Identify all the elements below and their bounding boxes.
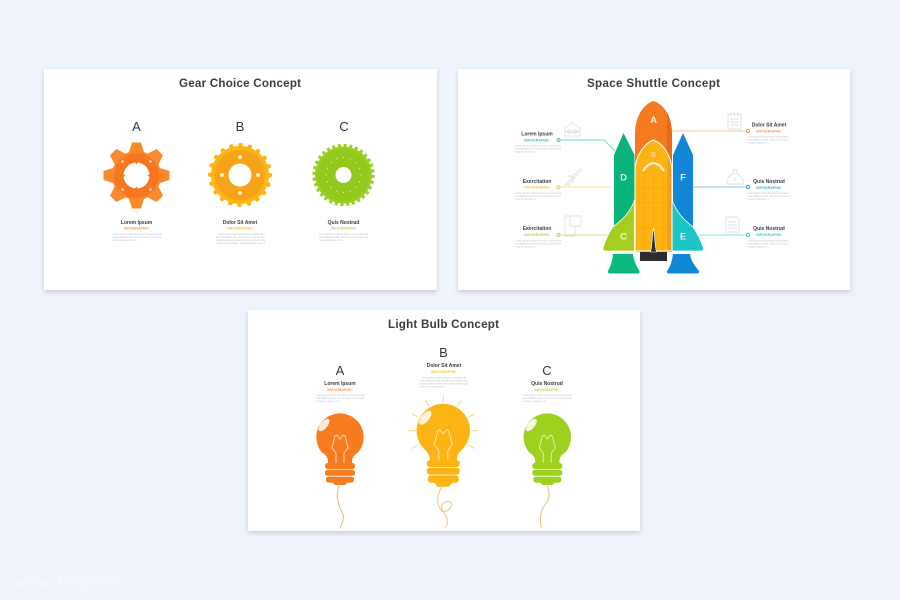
icon: building xyxy=(565,121,580,136)
black engine bar xyxy=(640,252,667,261)
text block: gear B: sed adipiscing elit, sed do eiusmod tempor xyxy=(216,235,265,239)
text block: gear B xyxy=(216,220,266,245)
left booster D xyxy=(614,133,634,250)
watermark: www.35sj.com xyxy=(13,573,122,590)
text block: exercitation left 1: Exercitation xyxy=(523,179,551,185)
text block: quis nostrud right 2: Quis Nostrud xyxy=(753,226,785,232)
text block: quis nostrud right 2: INFOGRAPHIC xyxy=(756,233,782,237)
text block: gear A xyxy=(112,220,162,242)
text block: bulb C: sed adipiscing elit, sed do eiusmod tempor xyxy=(522,396,572,400)
icon: green gear xyxy=(314,146,373,204)
text block: quis nostrud right 1: INFOGRAPHIC xyxy=(756,186,782,190)
text block: dolor sit amet right: Lorem ipsum dolor sit amet, consectetur xyxy=(748,134,789,138)
panel: space shuttle concept xyxy=(458,69,850,290)
text block: gear C xyxy=(319,220,368,242)
text block: bulb B: INFOGRAPHIC xyxy=(431,370,457,374)
text block: bulb C: INFOGRAPHIC xyxy=(534,388,560,392)
connector lines xyxy=(557,130,750,236)
text block: lorem ipsum left: sed adipiscing elit, sed do eiusmod tempor xyxy=(514,146,562,150)
text block: bulb A: INFOGRAPHIC xyxy=(327,388,353,392)
text block: quis nostrud right 2: Lorem ipsum dolor sit amet, consectetur xyxy=(748,238,789,242)
right nozzle xyxy=(667,254,699,274)
text block: bulb C: Quis Nostrud xyxy=(531,381,563,387)
text block: gear B: Dolor Sit Amet xyxy=(223,220,258,226)
text block: lorem ipsum left xyxy=(514,132,562,154)
text block: bulb B xyxy=(420,363,469,388)
text block: gear A: magna aliqua ut enim xyxy=(112,238,138,242)
icon: yellow bulb with rays xyxy=(408,396,478,527)
text block: dolor sit amet right xyxy=(748,122,789,144)
text block: quis nostrud right 1: Lorem ipsum dolor sit amet, consectetur xyxy=(748,191,789,195)
text block: quis nostrud right 1: Quis Nostrud xyxy=(753,179,785,185)
letter A: A xyxy=(336,363,345,378)
text block: bulb A xyxy=(316,381,365,403)
letter B: B xyxy=(236,119,244,134)
panel: light bulb concept xyxy=(248,310,640,531)
text block: exercitation left 1 xyxy=(514,179,562,201)
text block: exercitation left 1: INFOGRAPHIC xyxy=(524,186,550,190)
text block: dolor sit amet right: Dolor Sit Amet xyxy=(752,122,787,128)
text block: gear C: Lorem ipsum dolor sit amet, consectetur elit xyxy=(319,232,368,236)
text block: bulb B: nostrud exercitation xyxy=(420,384,445,388)
text block: lorem ipsum left: Lorem ipsum dolor sit amet, consectetur xyxy=(514,144,562,148)
wing E xyxy=(672,200,704,251)
icon: rocket xyxy=(564,169,581,186)
icon: money bag xyxy=(727,170,743,184)
external tank A xyxy=(635,101,672,252)
right booster F xyxy=(673,133,693,250)
text block: quis nostrud right 2: magna aliqua ut xyxy=(748,244,769,248)
text block: gear B: Lorem ipsum dolor sit amet, consectetur elit xyxy=(218,232,263,236)
text block: gear C: magna aliqua ut enim xyxy=(319,238,344,242)
text block: quis nostrud right 1: sed adipiscing elit, sed do eiusmod xyxy=(748,194,789,198)
icon: yellow gear xyxy=(210,145,270,205)
shuttle letters xyxy=(620,115,686,242)
text block: bulb B: Lorem ipsum dolor sit amet, consectetur elit xyxy=(422,376,466,380)
text block: exercitation left 1: Lorem ipsum dolor sit amet, consectetur xyxy=(514,191,562,195)
panel: gear choice concept xyxy=(44,69,437,290)
text block: bulb B: Dolor Sit Amet xyxy=(427,363,462,369)
text block: gear C: sed adipiscing elit, sed do eiusmod tempor xyxy=(319,235,368,239)
text block: gear B: INFOGRAPHIC xyxy=(227,226,253,230)
text block: quis nostrud right 1 xyxy=(748,179,789,201)
shuttle letters: D xyxy=(620,172,627,184)
icon: clipboard xyxy=(728,112,741,129)
text block: lorem ipsum left: Lorem Ipsum xyxy=(521,132,553,138)
text block: bulb A: Lorem ipsum dolor sit amet, consectetur elit xyxy=(316,393,365,397)
text block: gear A: sed adipiscing elit, sed do eiusmod tempor xyxy=(112,235,162,239)
text block: quis nostrud right 1: magna aliqua ut xyxy=(748,197,769,201)
icon: orange gear xyxy=(104,142,170,208)
engine spike xyxy=(650,228,656,252)
shuttle letters: A xyxy=(650,115,657,126)
text block: exercitation left 1: magna aliqua ut xyxy=(514,197,536,201)
text block: dolor sit amet right: INFOGRAPHIC xyxy=(756,130,782,134)
text block: gear C: INFOGRAPHIC xyxy=(331,226,356,230)
text block: bulb A: Lorem Ipsum xyxy=(324,381,356,387)
text block: exercitation left 2: Lorem ipsum dolor sit amet, consectetur xyxy=(514,238,562,242)
text block: bulb C: magna aliqua ut xyxy=(522,399,546,403)
shuttle letters: F xyxy=(680,172,686,184)
letter C: C xyxy=(339,119,349,134)
text block: bulb C xyxy=(522,381,572,403)
text block: exercitation left 2: Exercitation xyxy=(523,226,551,232)
text block: gear B: nostrud exercitation ullamco laboris nisi ut xyxy=(216,241,265,245)
icon: document xyxy=(726,217,739,232)
icon: green bulb xyxy=(524,413,571,528)
heading: gear choice: Gear Choice Concept xyxy=(179,77,301,90)
icon: orange bulb xyxy=(316,413,364,528)
text block: gear A: Lorem ipsum dolor sit amet, consectetur elit xyxy=(112,232,162,236)
orbiter B xyxy=(635,140,672,251)
text block: quis nostrud right 2: sed adipiscing elit, sed do eiusmod xyxy=(748,242,789,246)
text block: dolor sit amet right: magna aliqua ut xyxy=(748,140,769,144)
letter C: C xyxy=(542,363,552,378)
text block: gear A: INFOGRAPHIC xyxy=(124,226,149,230)
shuttle illustration xyxy=(603,101,704,274)
heading: space shuttle: Space Shuttle Concept xyxy=(587,77,720,90)
text block: gear C: Quis Nostrud xyxy=(328,220,359,226)
wing C xyxy=(603,200,634,251)
text block: gear B: magna aliqua ut enim ad minim veniam quis xyxy=(216,238,266,242)
text block: quis nostrud right 2 xyxy=(748,226,789,248)
text block: bulb B: magna aliqua ut enim ad minim veniam quis xyxy=(420,382,469,386)
text block: bulb B: sed adipiscing elit, sed do eiusmod tempor xyxy=(420,378,469,382)
text block: exercitation left 2 xyxy=(514,226,562,248)
icon: puzzle xyxy=(565,216,581,236)
text block: lorem ipsum left: magna aliqua ut xyxy=(514,150,536,154)
text block: lorem ipsum left: INFOGRAPHIC xyxy=(524,138,550,142)
text block: gear A: Lorem Ipsum xyxy=(121,220,153,226)
text block: bulb A: magna aliqua ut xyxy=(316,399,339,403)
text block: bulb C: Lorem ipsum dolor sit amet, consectetur elit xyxy=(522,393,572,397)
text block: exercitation left 2: magna aliqua ut xyxy=(514,244,536,248)
text block: exercitation left 2: sed adipiscing elit, sed do eiusmod tempor xyxy=(514,242,562,246)
shuttle letters: B xyxy=(651,152,656,159)
letter A: A xyxy=(132,119,141,134)
shuttle letters: C xyxy=(620,232,627,242)
text block: exercitation left 1: sed adipiscing elit, sed do eiusmod tempor xyxy=(514,194,562,198)
letter B: B xyxy=(439,345,448,360)
left nozzle xyxy=(608,254,640,274)
heading: light bulb: Light Bulb Concept xyxy=(388,318,499,331)
shuttle letters: E xyxy=(680,232,686,242)
cockpit arc xyxy=(643,163,664,171)
text block: exercitation left 2: INFOGRAPHIC xyxy=(524,233,550,237)
text block: bulb A: sed adipiscing elit, sed do eiusmod tempor xyxy=(316,396,365,400)
text block: dolor sit amet right: sed adipiscing elit, sed do eiusmod xyxy=(748,138,789,142)
